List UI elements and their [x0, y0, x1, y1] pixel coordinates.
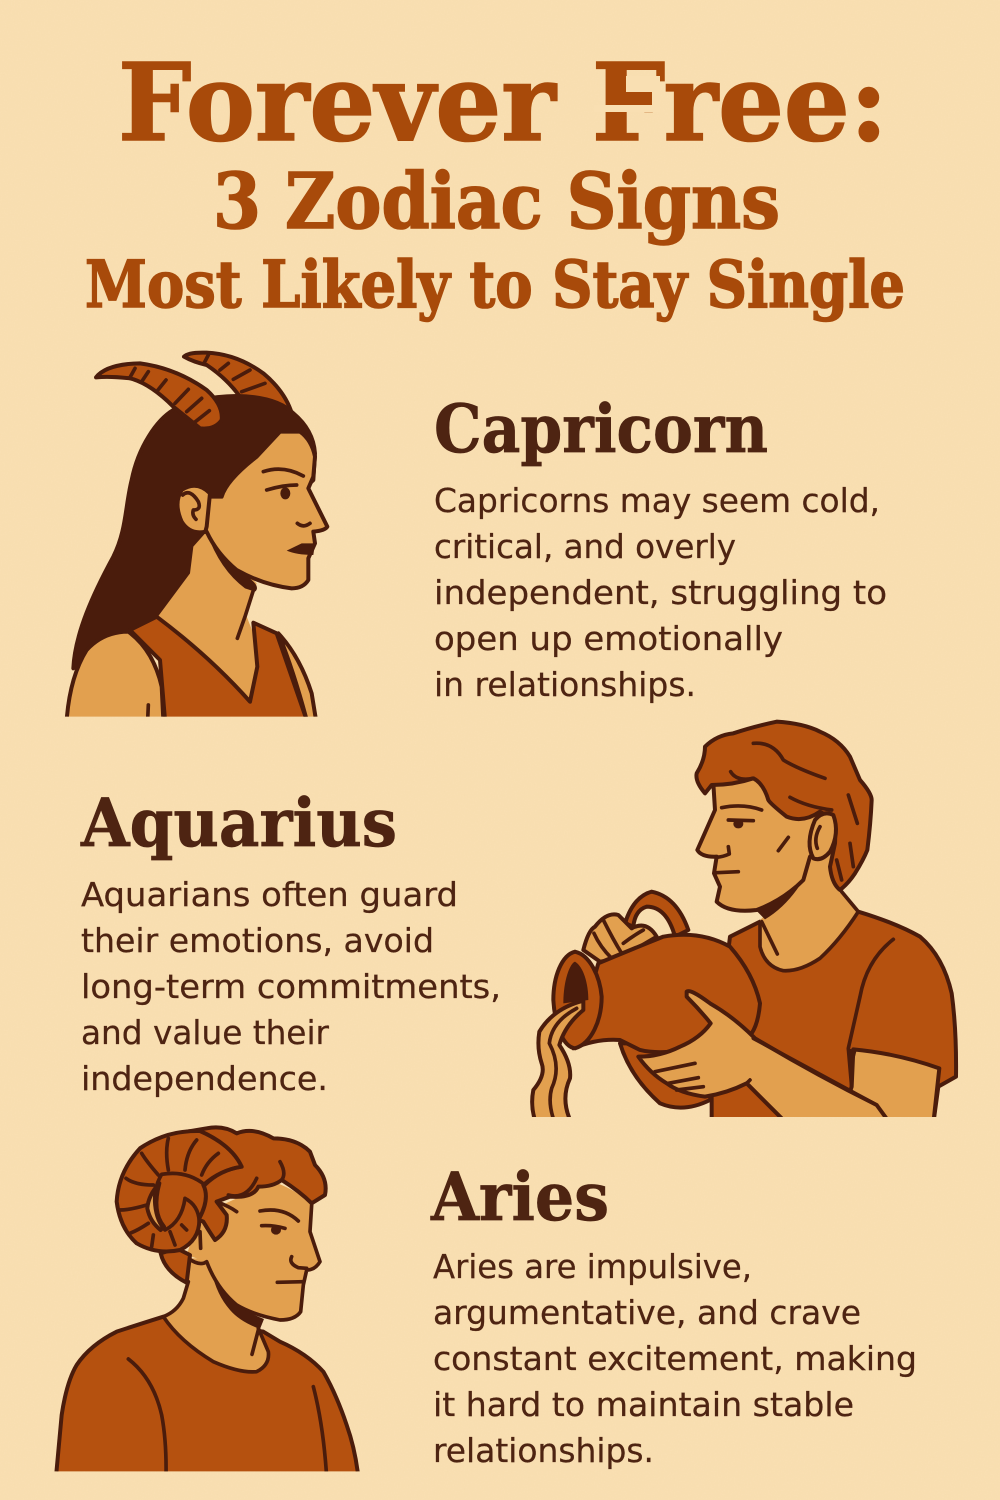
title: Forever Free:	[118, 41, 888, 166]
text block: Aquarius description: their emotions, avoid	[81, 921, 434, 960]
text block: Aries description: it hard to maintain stable	[433, 1385, 854, 1424]
text block: Aries description: relationships.	[433, 1431, 654, 1470]
heading: Aquarius: Aquarius	[80, 784, 397, 862]
text block: Aquarius description	[81, 875, 501, 1098]
text block: Aquarius description: long-term commitments,	[81, 967, 501, 1006]
illustration: Aries man with ram horn	[56, 1127, 358, 1477]
text block: Aries description: constant excitement, making	[433, 1339, 917, 1378]
illustration: Aquarius man pouring a water jug	[532, 722, 956, 1123]
text block: Aries description: argumentative, and crave	[433, 1293, 861, 1332]
title	[85, 41, 905, 323]
text block: Aries description	[433, 1247, 917, 1470]
text block: Capricorn description: open up emotionally	[434, 619, 783, 658]
text block: Aquarius description: and value their	[81, 1013, 329, 1052]
text block: Capricorn description: Capricorns may seem cold,	[434, 481, 880, 520]
heading: Aries: Aries	[430, 1158, 609, 1236]
illustration: Capricorn woman with goat horns	[67, 353, 327, 720]
text block: Capricorn description	[434, 481, 887, 704]
text block: Aquarius description: Aquarians often guard	[81, 875, 458, 914]
title: 3 Zodiac Signs	[213, 157, 780, 247]
text block: Aries description: Aries are impulsive,	[433, 1247, 752, 1286]
text block: Capricorn description: critical, and overly	[434, 527, 736, 566]
heading: Capricorn: Capricorn	[434, 390, 768, 468]
text block: Capricorn description: independent, struggling to	[434, 573, 887, 612]
text block: Aquarius description: independence.	[81, 1059, 328, 1098]
text block: Capricorn description: in relationships.	[434, 665, 696, 704]
